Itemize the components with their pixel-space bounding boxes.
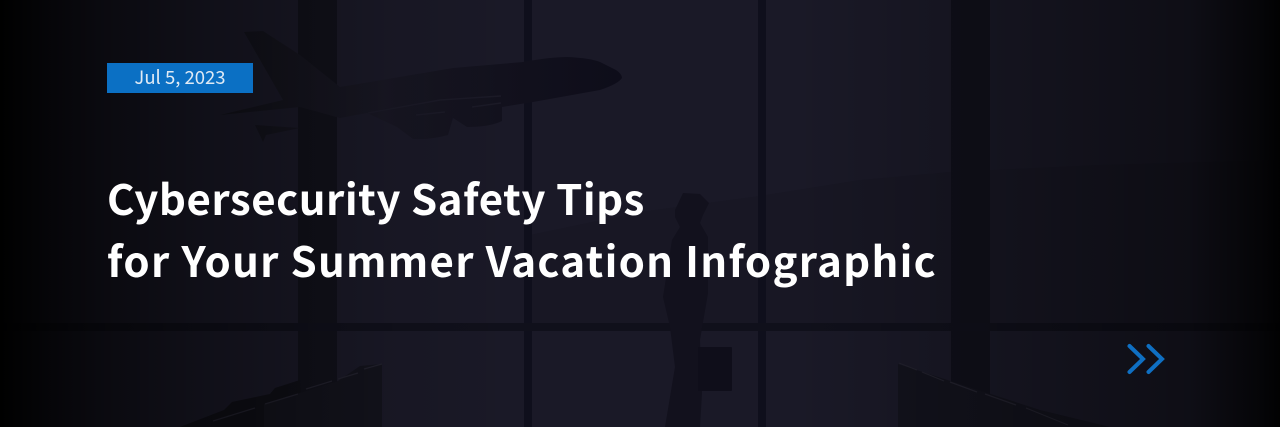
- airplane wing highlights: [368, 96, 501, 115]
- distant hills: [530, 160, 1280, 323]
- date badge: Jul 5, 2023: [134, 64, 226, 90]
- icon: double chevron arrow: [1127, 344, 1165, 374]
- title: Cybersecurity Safety Tips: [107, 167, 645, 228]
- left railing: [180, 364, 382, 427]
- title: [107, 167, 937, 290]
- title: for Your Summer Vacation Infographic: [107, 229, 937, 290]
- traveller silhouette: [663, 193, 732, 427]
- right railing: [898, 363, 1110, 427]
- airplane silhouette: [220, 31, 622, 142]
- date badge: [107, 63, 253, 93]
